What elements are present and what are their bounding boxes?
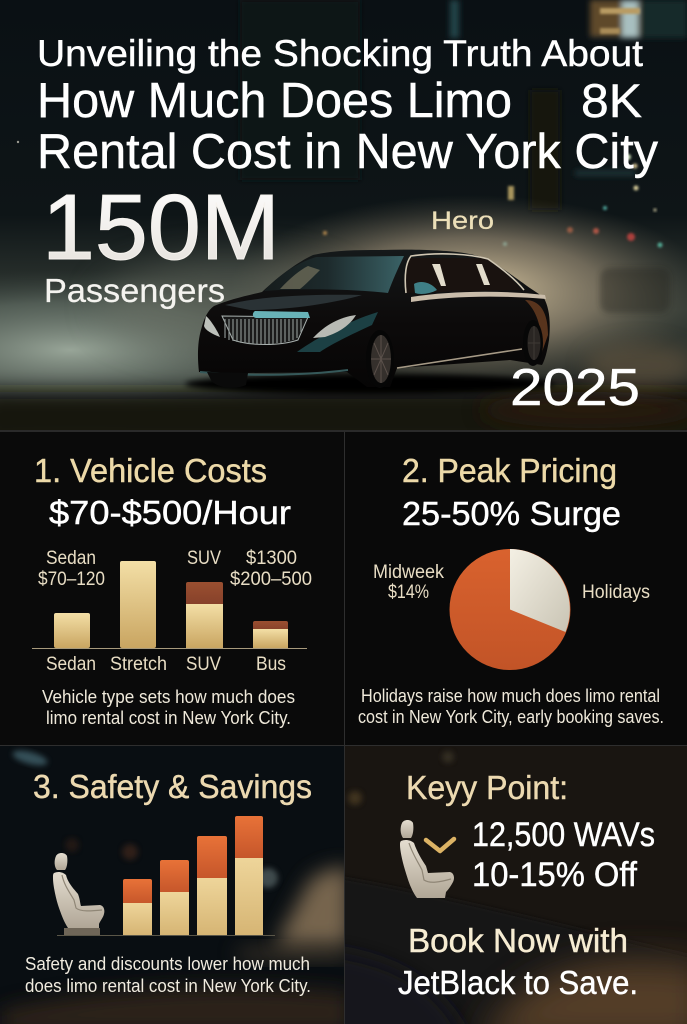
hero background: misty city street — [0, 0, 687, 442]
panel 3 background — [0, 746, 350, 1024]
belt line highlight — [411, 292, 546, 302]
call to action: JetBlack to Save. — [398, 964, 638, 1001]
title: How Much Does Limo — [37, 74, 512, 128]
axis labels: Bus — [256, 654, 286, 675]
panel 1: vehicle costs — [0, 432, 344, 745]
description: Vehicle type sets how much does — [42, 687, 295, 707]
icon: seat with check — [400, 820, 454, 898]
panel 2: peak pricing — [345, 432, 687, 745]
side windows — [405, 258, 521, 293]
roof chrome trim — [405, 254, 524, 293]
bar: SUV — [186, 582, 223, 648]
panel 3: safety and savings — [0, 746, 350, 1024]
grille — [222, 316, 308, 344]
title — [37, 33, 658, 179]
description: limo rental cost in New York City. — [46, 708, 291, 728]
call to action — [398, 922, 638, 1001]
check mark — [426, 839, 454, 851]
axis labels: SUV — [186, 654, 221, 675]
call to action: Book Now with — [408, 922, 628, 959]
hero panel — [0, 0, 687, 442]
stat: discount: 10-15% Off — [472, 856, 638, 894]
label: Hero: Hero — [431, 207, 494, 235]
description — [25, 954, 311, 996]
limo body — [198, 250, 550, 387]
bar 1 — [123, 879, 152, 935]
rocker chrome strip — [397, 349, 522, 368]
description: does limo rental cost in New York City. — [25, 976, 311, 996]
panel 4 background — [325, 746, 687, 1024]
stat: 8K: 8K — [581, 74, 642, 127]
description — [42, 687, 295, 728]
fender teal reflection — [297, 312, 378, 352]
rear wheel — [528, 324, 543, 366]
year: 2025: 2025 — [510, 359, 640, 417]
bar 2 — [160, 860, 189, 935]
bar chart: vehicle price — [32, 548, 312, 675]
label: midweek — [373, 562, 444, 603]
top labels: SUV — [187, 548, 221, 569]
axis labels: Stretch — [110, 654, 167, 675]
heading: 1. Vehicle Costs: 1. Vehicle Costs — [34, 452, 267, 489]
label: midweek: Midweek — [373, 562, 444, 583]
axis labels: Sedan — [46, 654, 96, 675]
stat: 150M: 150M — [42, 175, 280, 279]
label: midweek: $14% — [388, 582, 429, 603]
heading: 2. Peak Pricing: 2. Peak Pricing — [402, 452, 617, 489]
bar: sedan — [54, 613, 90, 648]
hood highlight — [225, 295, 362, 310]
panel 4: key point — [325, 746, 687, 1024]
bar: bus — [253, 621, 288, 648]
top labels: $200–500 — [230, 569, 312, 590]
stacked bars: savings — [57, 816, 275, 936]
bar 3 — [197, 836, 227, 935]
side mirror — [414, 282, 437, 294]
description: Holidays raise how much does limo rental — [361, 686, 660, 706]
lower bumper teal line — [200, 370, 348, 375]
icon: car seat — [53, 853, 104, 935]
front tire left — [207, 372, 248, 388]
bar 4 — [235, 816, 263, 935]
limousine — [185, 250, 555, 394]
top labels: Sedan — [46, 548, 96, 569]
rear fender glow — [525, 300, 548, 352]
stat label: Passengers: Passengers — [44, 272, 225, 309]
heading: 3. Safety & Savings: 3. Safety & Savings — [33, 768, 312, 805]
top labels: $70–120 — [38, 569, 105, 590]
title: Rental Cost in New York City — [37, 125, 658, 179]
pie chart — [450, 549, 570, 670]
description — [358, 686, 664, 727]
subheading: price range: $70-$500/Hour — [49, 494, 291, 531]
top labels: $1300 — [246, 548, 297, 569]
headlights — [313, 315, 356, 338]
subheading: surge: 25-50% Surge — [402, 495, 621, 532]
label: holidays: Holidays — [582, 582, 650, 603]
axis labels — [46, 654, 286, 675]
stat: WAVs: 12,500 WAVs — [472, 816, 655, 854]
front wheel — [371, 335, 391, 383]
windshield — [264, 256, 404, 293]
heading: Keyy Point: Keyy Point: — [406, 769, 568, 806]
bar: stretch — [120, 561, 156, 648]
title: Unveiling the Shocking Truth About — [37, 33, 644, 74]
top labels — [38, 548, 312, 590]
description: Safety and discounts lower how much — [25, 954, 310, 974]
